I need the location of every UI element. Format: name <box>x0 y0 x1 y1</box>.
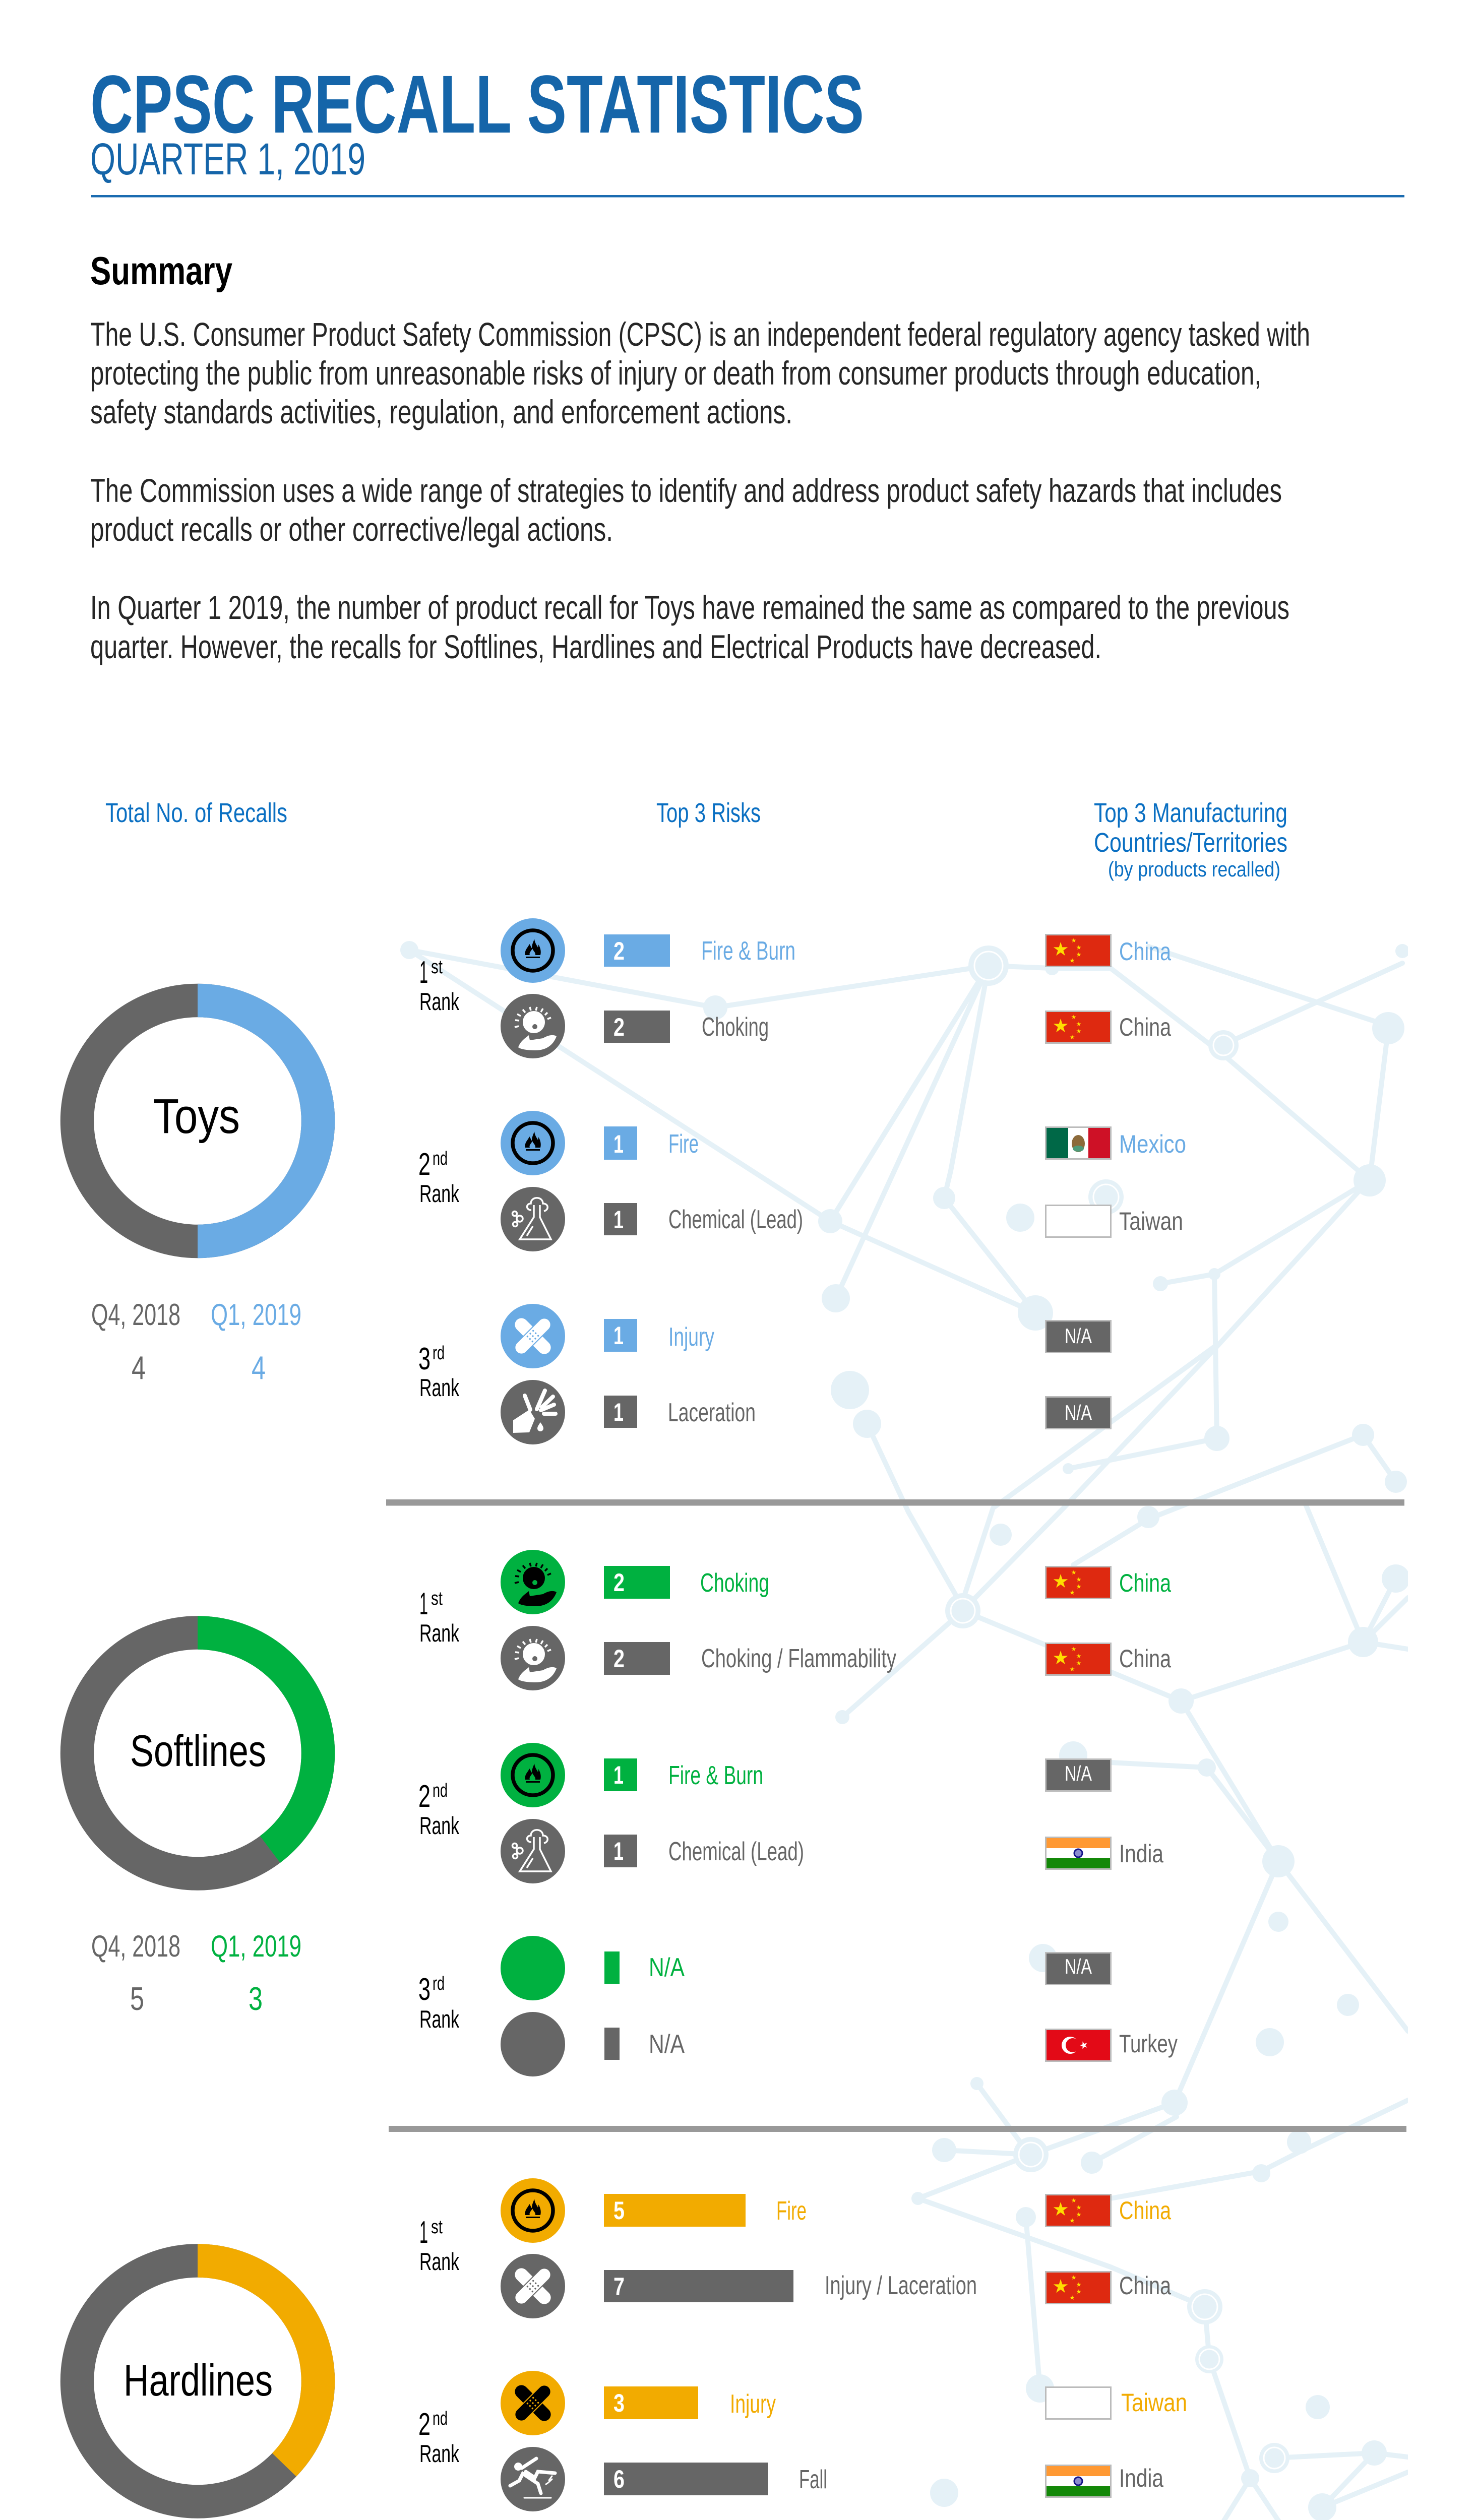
bar: fire and burn: 1 <box>613 1761 624 1789</box>
icon: fall <box>501 2447 565 2511</box>
flag: turkey <box>1046 2029 1178 2061</box>
donut chart: toys <box>77 1000 318 1241</box>
flag: china <box>1046 2194 1171 2227</box>
icon: choking <box>501 994 565 1058</box>
icon: injury <box>501 2371 565 2435</box>
bar: fire and burn <box>604 934 795 967</box>
rank label: 1st <box>419 2215 459 2276</box>
bar: choking flammability: 2 <box>613 1645 625 1673</box>
flag: china <box>1046 934 1171 967</box>
stats: toys: 4 <box>132 1349 146 1386</box>
rank label: 3rd: Rank <box>419 1374 459 1402</box>
donut chart: softlines: Softlines <box>130 1726 266 1776</box>
flag: not available: N/A <box>1065 1324 1092 1348</box>
donut chart: softlines <box>77 1633 318 1874</box>
rank label: 2nd <box>418 2407 459 2468</box>
donut chart: hardlines <box>77 2261 318 2502</box>
bar: chemical lead <box>604 1203 803 1235</box>
bar: choking <box>604 1011 769 1043</box>
bar: fire: 1 <box>613 1130 624 1158</box>
bar: fall <box>604 2463 827 2495</box>
donut chart: toys: Toys <box>153 1089 240 1144</box>
bar: fire <box>604 1126 699 1160</box>
bar: chemical lead: Chemical (Lead) <box>668 1205 803 1234</box>
bar: fire: 5 <box>613 2196 625 2225</box>
rank label: 1st <box>419 955 459 1016</box>
stats: softlines: Q1, 2019 <box>211 1929 301 1963</box>
icon: fire and burn <box>501 918 565 983</box>
flag: not available <box>1046 1952 1111 1985</box>
flag: taiwan: Taiwan <box>1121 2388 1187 2417</box>
subtitle: QUARTER 1, 2019 <box>90 134 365 184</box>
stats: softlines: Q4, 2018 <box>91 1929 180 1963</box>
bar: fire <box>604 2194 807 2227</box>
rank label: 2nd <box>418 1779 459 1840</box>
rank label: 1st: st <box>431 957 443 978</box>
bar: not available: N/A <box>649 1953 685 1982</box>
icon: chemical lead <box>501 1819 565 1883</box>
panel: softlines <box>77 1550 1178 2076</box>
bar: laceration <box>604 1396 756 1428</box>
bar: laceration: Laceration <box>668 1398 756 1427</box>
icon: laceration <box>501 1380 565 1444</box>
flag: taiwan <box>1046 2387 1187 2419</box>
flag: india <box>1046 2464 1163 2497</box>
column heading: top 3 risks: Top 3 Risks <box>656 798 761 828</box>
bar: injury laceration <box>604 2270 977 2302</box>
bar: fall: Fall <box>799 2465 827 2494</box>
bar: choking: 2 <box>613 1013 625 1041</box>
bar: fire and burn: 2 <box>613 937 625 965</box>
icon: fire and burn <box>501 1743 565 1807</box>
rank label: 2nd: 2 <box>418 2407 430 2442</box>
flag: not available <box>1046 1320 1111 1353</box>
icon: chemical lead <box>501 1187 565 1251</box>
flag: india: India <box>1119 1840 1163 1868</box>
bar: injury <box>604 1319 714 1352</box>
icon: fire <box>501 1111 565 1175</box>
bar: injury: 1 <box>613 1321 624 1350</box>
flag: china: China <box>1119 937 1171 966</box>
rank label: 3rd <box>418 1342 459 1402</box>
stats: softlines: 3 <box>249 1980 263 2017</box>
rank label: 1st: st <box>431 1588 443 1609</box>
flag: china: China <box>1119 2196 1171 2225</box>
bar: injury laceration: Injury / Laceration <box>825 2271 977 2300</box>
flag: mexico: Mexico <box>1119 1130 1186 1158</box>
rank label: 2nd: Rank <box>419 1180 459 1208</box>
bar: injury: Injury <box>668 1322 714 1352</box>
summary text block: quarter. However, the recalls for Softlines, Hardlines and Electrical Products have decreased. <box>90 628 1101 665</box>
flag: china: China <box>1119 1569 1171 1597</box>
bar: chemical lead: Chemical (Lead) <box>668 1837 804 1866</box>
icon: choking <box>501 1626 565 1690</box>
panel: toys <box>77 918 1186 1444</box>
summary text block <box>90 316 1310 665</box>
panel: hardlines <box>77 2178 1337 2520</box>
rank label: 3rd: 3 <box>418 1342 430 1376</box>
bar: fire and burn: Fire & Burn <box>668 1761 763 1790</box>
flag: india: India <box>1119 2464 1163 2492</box>
column heading: total recalls: Total No. of Recalls <box>105 798 287 828</box>
flag: china <box>1046 1566 1171 1599</box>
bar: choking: 2 <box>613 1568 625 1597</box>
bar: choking <box>604 1566 769 1599</box>
rank label: 1st: 1 <box>419 955 428 990</box>
rank label: 3rd: 3 <box>418 1972 430 2007</box>
flag: india <box>1046 1838 1163 1869</box>
bar: not available: N/A <box>649 2030 685 2059</box>
flag: china: China <box>1119 1013 1171 1041</box>
icon: injury <box>501 1304 565 1368</box>
flag: china <box>1046 1643 1171 1675</box>
stats: softlines: 5 <box>130 1980 144 2017</box>
bar: fire: Fire <box>776 2196 807 2226</box>
title: CPSC RECALL STATISTICS <box>90 58 864 150</box>
donut chart: hardlines: Hardlines <box>124 2355 273 2405</box>
icon: blank green <box>501 1936 565 2000</box>
rank label: 3rd: rd <box>433 1343 445 1364</box>
background: molecular network pattern <box>400 941 1416 2520</box>
rank label: 1st: st <box>431 2217 443 2238</box>
flag: mexico <box>1046 1127 1186 1159</box>
rank label: 1st: Rank <box>419 988 459 1016</box>
stats: toys: Q4, 2018 <box>91 1298 180 1332</box>
column heading: top 3 manufacturing countries <box>1094 798 1287 881</box>
rank label: 1st: 1 <box>419 2215 428 2250</box>
bar: fire and burn: Fire & Burn <box>701 936 795 966</box>
rank label: 3rd: Rank <box>419 2006 459 2033</box>
rank label: 3rd: rd <box>433 1973 445 1994</box>
summary text block: safety standards activities, regulation, and enforcement actions. <box>90 393 792 430</box>
bar: fire: Fire <box>668 1129 699 1159</box>
bar: chemical lead: 1 <box>613 1837 624 1865</box>
column heading: top 3 manufacturing countries: Top 3 Manufacturing <box>1094 798 1287 828</box>
icon: choking <box>501 1550 565 1614</box>
flag: not available: N/A <box>1065 1955 1092 1978</box>
bar: chemical lead <box>604 1835 804 1867</box>
icon: injury <box>501 2254 565 2318</box>
rank label: 2nd: Rank <box>419 1812 459 1840</box>
bar: choking: Choking <box>700 1568 769 1598</box>
rank label: 2nd <box>418 1147 459 1208</box>
rank label: 1st: Rank <box>419 2248 459 2276</box>
flag: not available <box>1046 1759 1111 1791</box>
flag: china <box>1046 2272 1171 2303</box>
flag: not available: N/A <box>1065 1761 1092 1785</box>
bar: choking: Choking <box>702 1013 769 1042</box>
rank label: 1st <box>419 1587 459 1647</box>
flag: china <box>1046 1011 1171 1043</box>
bar: injury laceration: 7 <box>613 2273 625 2301</box>
bar: fall: 6 <box>613 2465 625 2493</box>
flag: china: China <box>1119 2272 1171 2300</box>
bar: not available <box>604 2028 685 2060</box>
flag: china: China <box>1119 1645 1171 1673</box>
rank label: 2nd: nd <box>433 1780 448 1801</box>
flag: taiwan: Taiwan <box>1119 1207 1183 1235</box>
icon: blank gray <box>501 2012 565 2076</box>
heading: summary: Summary <box>90 248 232 293</box>
bar: laceration: 1 <box>613 1398 624 1426</box>
bar: chemical lead: 1 <box>613 1206 624 1234</box>
column heading: top 3 manufacturing countries: (by products recalled) <box>1108 857 1280 881</box>
bar: injury: Injury <box>730 2389 776 2419</box>
summary text block: product recalls or other corrective/legal actions. <box>90 511 613 548</box>
bar: injury: 3 <box>613 2389 625 2417</box>
column heading: top 3 manufacturing countries: Countries/Territories <box>1094 828 1287 858</box>
rank label: 2nd: Rank <box>419 2440 459 2468</box>
flag: turkey: Turkey <box>1119 2030 1178 2058</box>
stats: softlines <box>91 1929 301 2017</box>
rank label: 2nd: 2 <box>418 1147 430 1182</box>
icon: fire <box>501 2178 565 2243</box>
rank label: 1st: 1 <box>419 1587 428 1621</box>
bar: injury <box>604 2386 776 2419</box>
bar: choking flammability: Choking / Flammability <box>701 1644 896 1673</box>
bar: not available <box>604 1951 685 1984</box>
flag: taiwan <box>1046 1206 1183 1237</box>
title underline <box>91 195 1404 198</box>
bar: fire and burn <box>604 1758 763 1791</box>
stats: toys: 4 <box>252 1349 266 1386</box>
bar: choking flammability <box>604 1642 896 1675</box>
rank label: 2nd: nd <box>433 1148 448 1169</box>
rank label: 2nd: 2 <box>418 1779 430 1814</box>
stats: toys: Q1, 2019 <box>211 1298 301 1332</box>
rank label: 2nd: nd <box>433 2408 448 2429</box>
rank label: 1st: Rank <box>419 1620 459 1647</box>
flag: not available: N/A <box>1065 1401 1092 1424</box>
stats: toys <box>91 1298 301 1386</box>
rank label: 3rd <box>418 1972 459 2033</box>
flag: not available <box>1046 1397 1111 1428</box>
